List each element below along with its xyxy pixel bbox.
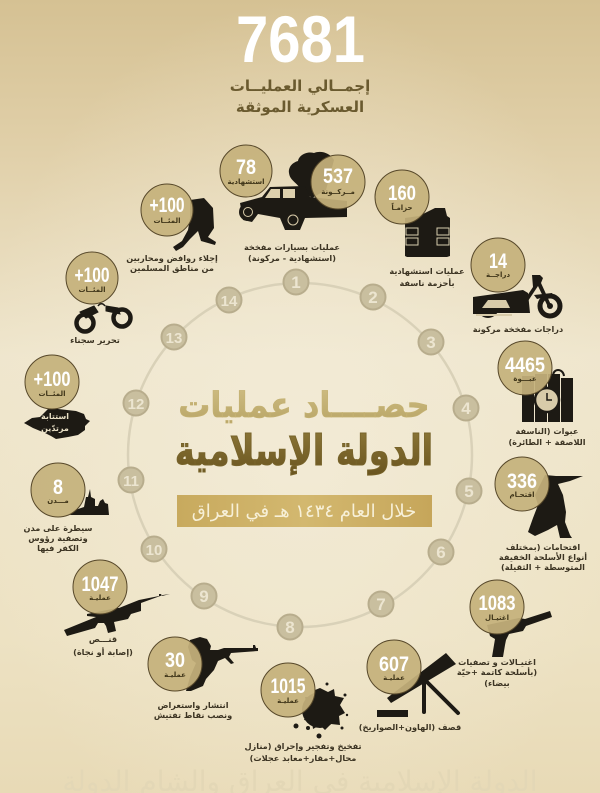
badge: 8 xyxy=(53,476,63,499)
badge: 78 xyxy=(220,145,272,197)
badge: عمليـة xyxy=(277,697,299,705)
badge: 1015 xyxy=(270,675,306,698)
center heading line 2: الدولة الإسلامية xyxy=(175,426,433,475)
badge xyxy=(25,355,79,409)
icon: ink blot with caption: استتابة xyxy=(41,412,69,421)
timeline nodes 1 to 14: 9 xyxy=(199,587,209,606)
label: من مناطق المسلمين xyxy=(130,263,214,274)
badge: اقتحـام xyxy=(509,491,535,499)
title: total number: 7681 xyxy=(236,2,365,76)
icon: prone rifleman xyxy=(186,637,258,691)
timeline ring xyxy=(128,283,472,627)
label xyxy=(126,253,218,274)
label: وتصفية رؤوس xyxy=(28,533,88,544)
timeline nodes 1 to 14: 8 xyxy=(285,618,295,637)
label: عمليات بسيارات مفخخة xyxy=(244,242,340,253)
icon: city skyline xyxy=(70,489,109,515)
icon: kneeling fighter with RPG xyxy=(528,475,583,538)
icon: sniper rifle xyxy=(64,594,170,636)
label xyxy=(499,542,587,573)
badge: 336 xyxy=(507,470,537,493)
title: subtitle xyxy=(230,77,370,116)
icon: motorcycle xyxy=(473,275,560,318)
badge xyxy=(261,663,315,717)
label xyxy=(154,700,232,721)
badge: المئــات xyxy=(38,390,66,398)
timeline nodes 1 to 14: 6 xyxy=(436,543,446,562)
icon: explosive vest xyxy=(405,208,450,257)
label xyxy=(389,266,465,289)
badge: دراجــة xyxy=(486,271,510,279)
badge xyxy=(367,640,421,694)
badge: 1083 xyxy=(478,592,516,615)
item: suicide vests xyxy=(375,170,465,289)
badge: المئــات xyxy=(153,217,181,225)
badge xyxy=(148,637,202,691)
label: الكفر فيها xyxy=(37,543,79,554)
badge: عمليـة xyxy=(383,674,405,682)
badge: +100 xyxy=(150,194,184,217)
timeline nodes 1 to 14: 13 xyxy=(166,330,182,347)
item: motorcycles xyxy=(471,238,563,335)
label: اغتيـالات و تصفيات xyxy=(458,657,536,668)
icon: ink blot with caption: مرتدّين xyxy=(41,424,69,433)
item: booby-trapping and burning xyxy=(244,663,362,764)
timeline nodes 1 to 14 xyxy=(118,270,482,640)
icon: time bomb xyxy=(522,370,573,422)
label xyxy=(508,426,586,448)
item: explosive devices xyxy=(498,341,586,448)
item: mortar shelling xyxy=(359,640,461,733)
label: تفخيخ وتفجير وإحراق (منازل xyxy=(244,741,362,752)
badge xyxy=(375,170,429,224)
badge: مـــدن xyxy=(47,497,69,505)
label: تحرير سجناء xyxy=(70,335,120,346)
timeline nodes 1 to 14: 10 xyxy=(146,542,162,559)
badge xyxy=(73,560,127,614)
label: عبوات (الناسفة xyxy=(516,426,578,437)
badge: 78: 78 xyxy=(236,156,256,179)
item: cities xyxy=(23,463,109,554)
label: قصف (الهاون+الصواريخ) xyxy=(359,722,461,733)
item: repentance of apostates xyxy=(24,355,90,439)
label: أنواع الأسلحة الخفيفة xyxy=(499,552,587,563)
badge xyxy=(498,341,552,395)
icon: ink blot with caption xyxy=(24,409,90,439)
center date band xyxy=(177,495,432,527)
label xyxy=(457,657,537,688)
label xyxy=(73,634,133,658)
label: ونصب نقاط تفتيش xyxy=(154,710,232,721)
icon: silenced pistol xyxy=(487,611,552,657)
timeline nodes 1 to 14: 4 xyxy=(461,399,471,418)
badge: 537: مــركــونة xyxy=(321,188,355,196)
timeline nodes 1 to 14: 5 xyxy=(464,482,474,501)
timeline nodes 1 to 14: 11 xyxy=(123,473,139,490)
badge xyxy=(495,457,549,511)
timeline nodes 1 to 14: 7 xyxy=(376,595,386,614)
label: عمليات استشهادية xyxy=(389,266,465,277)
badge: 160 xyxy=(388,182,416,205)
badge xyxy=(471,238,525,292)
icon: pickup truck with smoke xyxy=(239,152,347,230)
label: (استشهادية - مركونة) xyxy=(248,253,336,264)
item: freeing prisoners xyxy=(66,252,130,346)
badge: اغتيـال xyxy=(485,614,509,622)
badge xyxy=(470,580,524,634)
item: checkpoints xyxy=(148,637,258,721)
item: assassinations xyxy=(457,580,552,688)
timeline nodes 1 to 14: 1 xyxy=(291,273,301,292)
timeline nodes 1 to 14: 2 xyxy=(368,288,378,307)
center date band: خلال العام ١٤٣٤ هـ في العراق xyxy=(192,501,416,522)
label: دراجات مفخخة مركونة xyxy=(473,324,563,335)
icon: mortar xyxy=(377,653,458,717)
badge xyxy=(31,463,85,517)
badge xyxy=(66,252,118,304)
label: (بأسلحة كاتمة +حيّة xyxy=(457,667,537,677)
badge xyxy=(141,184,193,236)
badge: +100 xyxy=(34,368,70,391)
badge: عمليـة xyxy=(164,671,186,679)
label: قنـــص xyxy=(89,634,117,645)
title: subtitle: إجمــالي العمليــات xyxy=(230,77,370,95)
label: المتوسطة + الثقيلة) xyxy=(501,562,585,573)
item: assaults xyxy=(495,457,587,573)
badge: 78: استشهادية xyxy=(228,178,264,186)
icon: running man xyxy=(173,198,216,251)
badge: عمليـة xyxy=(89,594,111,602)
timeline nodes 1 to 14: 14 xyxy=(221,293,238,310)
badge: +100 xyxy=(74,264,110,287)
icon: handcuffs xyxy=(76,304,130,332)
timeline nodes 1 to 14: 12 xyxy=(128,396,144,413)
label: انتشار واستعراض xyxy=(157,700,229,711)
label xyxy=(244,741,362,764)
badge: المئــات xyxy=(78,286,106,294)
label: سيطرة على مدن xyxy=(23,523,93,534)
item: car bombs xyxy=(220,145,365,264)
label: بيضاء) xyxy=(484,678,510,688)
icon: ink splat xyxy=(294,682,348,738)
badge: 14 xyxy=(489,250,507,273)
label: (إصابة أو نجاة) xyxy=(73,647,133,658)
label xyxy=(244,242,340,264)
badge: حزامـاً xyxy=(391,202,413,212)
item: withdrawal of apostates xyxy=(126,184,218,274)
badge: عبـــوة xyxy=(513,375,537,383)
badge: 4465 xyxy=(505,354,545,377)
badge: 1047 xyxy=(82,573,118,596)
label: إجلاء روافض ومحاربين xyxy=(126,253,218,264)
badge: 607 xyxy=(379,653,409,676)
badge: 537 xyxy=(311,155,365,209)
label: اللاصقة + الطائرة) xyxy=(508,437,586,448)
title: subtitle: العسكرية الموثقة xyxy=(236,98,364,116)
label xyxy=(23,523,93,554)
label: محال+مقار+معابد عجلات) xyxy=(250,753,356,764)
timeline nodes 1 to 14: 3 xyxy=(426,333,436,352)
center heading line 1: حصــــاد عمليات xyxy=(178,385,430,425)
label: بأحزمة ناسفة xyxy=(399,278,455,289)
badge: 537: 537 xyxy=(323,165,353,188)
item: sniping xyxy=(64,560,170,658)
label: اقتحامات (بمختلف xyxy=(506,542,580,552)
badge: 30 xyxy=(165,649,185,672)
